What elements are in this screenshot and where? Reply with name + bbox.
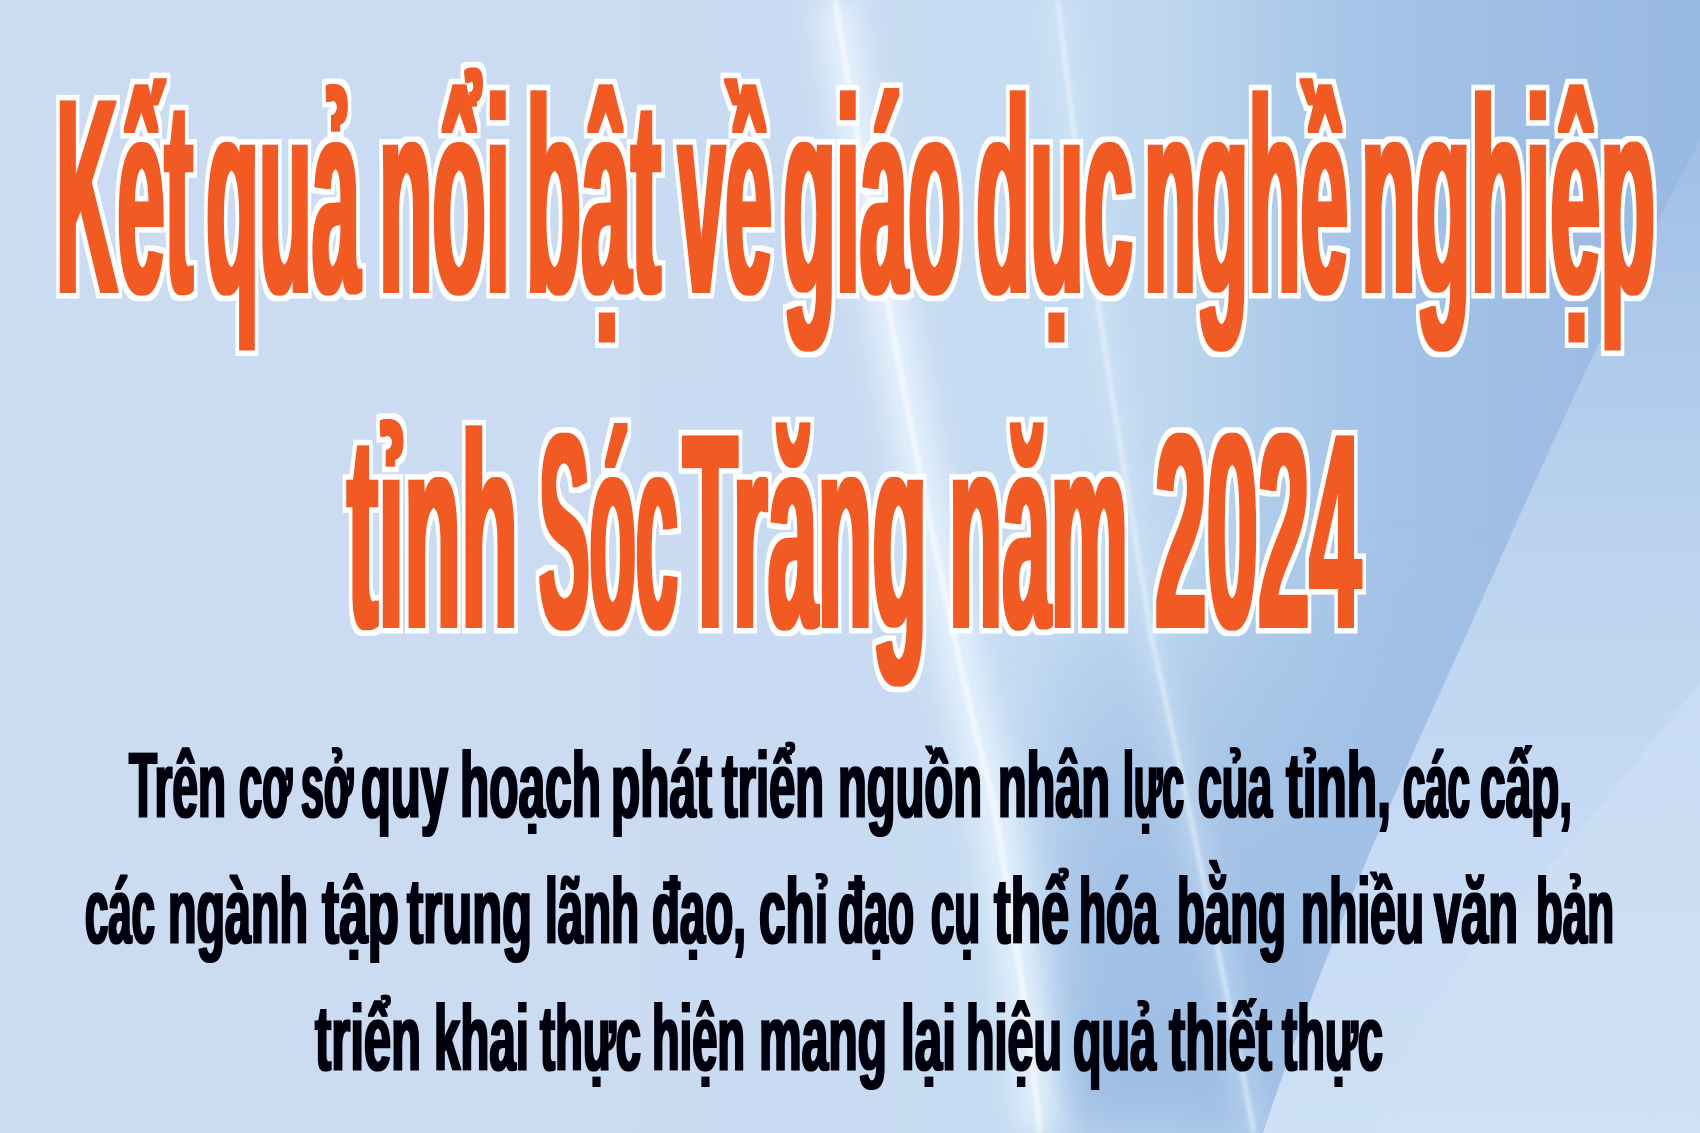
subtitle line 1: triển	[722, 733, 824, 837]
subtitle line 2: đạo	[838, 859, 914, 963]
subtitle line 2: bằng	[1177, 859, 1286, 963]
title line 1	[56, 41, 1655, 353]
title line 1: quả	[206, 41, 361, 353]
subtitle line 2: ngành	[168, 859, 308, 963]
subtitle line 2	[85, 859, 1614, 963]
title line 1: Kết	[56, 41, 193, 351]
subtitle line 1: cơ	[239, 733, 292, 837]
subtitle line 3: quả	[1073, 986, 1157, 1090]
subtitle line 1: hoạch	[460, 733, 601, 837]
title line 2: Sóc	[539, 376, 678, 686]
subtitle line 3: thực	[540, 986, 641, 1090]
subtitle	[85, 733, 1614, 1090]
title line 2: Trăng	[683, 376, 927, 688]
subtitle line 2: tập	[322, 859, 399, 963]
subtitle line 3: thiết	[1169, 986, 1272, 1090]
subtitle line 1: Trên	[129, 733, 226, 837]
subtitle line 1: của	[1198, 733, 1273, 837]
subtitle line 1: các	[1403, 733, 1470, 837]
subtitle line 2: lãnh	[545, 859, 639, 963]
subtitle: cấp,	[1480, 733, 1572, 837]
subtitle line 2: các	[85, 859, 155, 963]
subtitle line 2: văn	[1434, 859, 1518, 963]
subtitle line 2: hóa	[1079, 859, 1159, 963]
title line 1: nổi	[379, 41, 510, 351]
subtitle line 1: quy	[361, 733, 448, 837]
subtitle line 2: trung	[407, 859, 532, 963]
title	[56, 41, 1655, 688]
subtitle line 2: đạo,	[652, 859, 746, 963]
title line 1: giáo	[783, 41, 961, 353]
title line 2: năm	[949, 376, 1128, 686]
title line 2: tỉnh	[347, 376, 518, 686]
subtitle line 1: sở	[301, 733, 353, 837]
subtitle line 1: nguồn	[838, 733, 982, 837]
subtitle line 2: nhiều	[1301, 859, 1424, 963]
subtitle line 3: hiện	[652, 986, 745, 1090]
text: bản	[1536, 859, 1614, 963]
subtitle line 3	[315, 986, 1383, 1090]
title line 1: bật	[526, 41, 661, 351]
subtitle line 2: cụ	[931, 859, 980, 963]
subtitle line 3: hiệu	[966, 986, 1062, 1090]
subtitle: thực	[1282, 986, 1383, 1090]
subtitle line 1: tỉnh,	[1286, 733, 1391, 837]
subtitle line 3: triển	[315, 986, 421, 1090]
subtitle line 1: lực	[1123, 733, 1184, 837]
subtitle line 1: nhân	[998, 733, 1110, 837]
subtitle line 1: phát	[611, 733, 712, 837]
subtitle line 1	[129, 733, 1572, 837]
title line 2	[347, 376, 1362, 688]
subtitle line 3: khai	[434, 986, 529, 1090]
title line 1: về	[678, 41, 772, 351]
subtitle line 3: mang	[759, 986, 887, 1090]
subtitle line 2: chỉ	[759, 859, 828, 963]
title line 1: dục	[976, 41, 1133, 351]
subtitle line 3: lại	[901, 986, 956, 1090]
subtitle line 2: thể	[994, 859, 1069, 963]
